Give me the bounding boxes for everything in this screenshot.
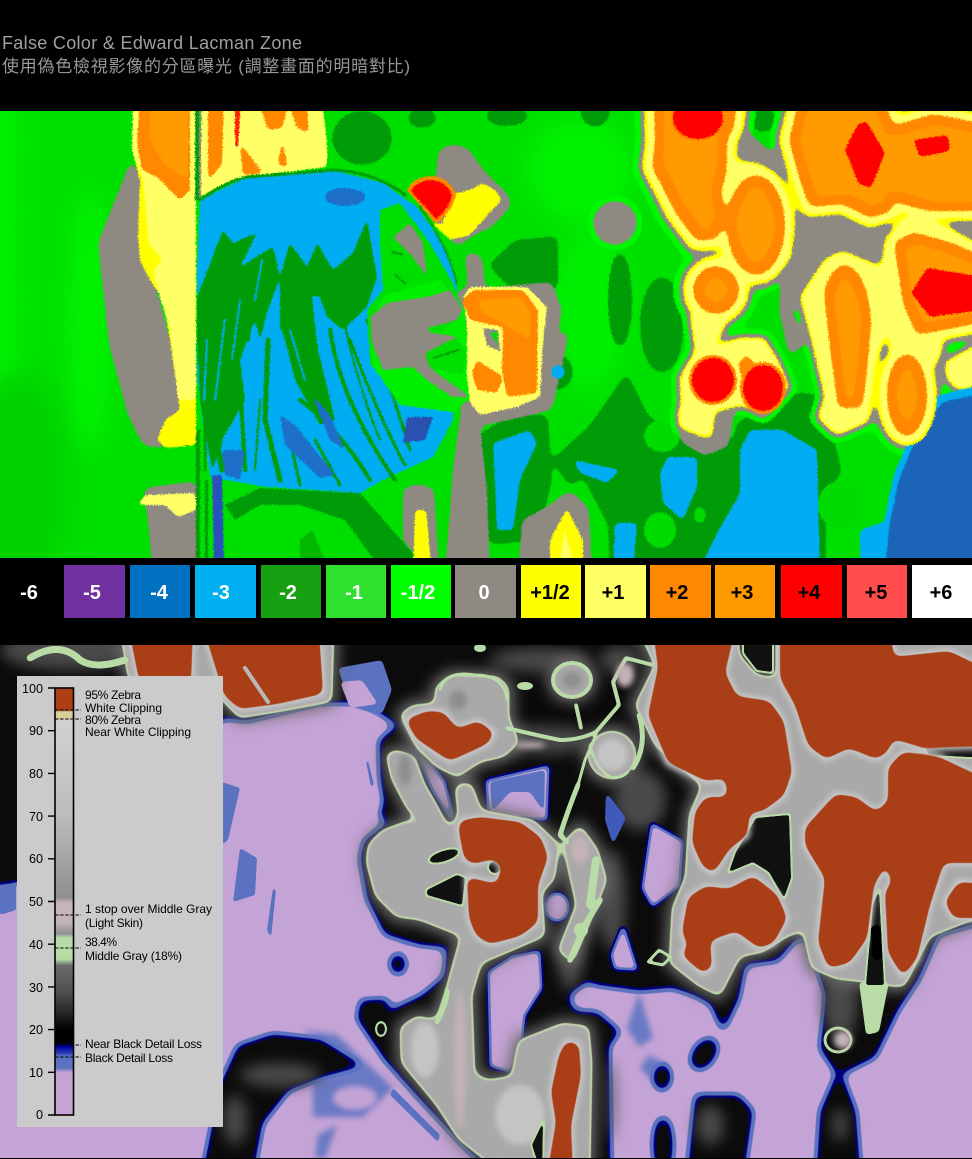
lamp rim <box>407 176 456 224</box>
swatch +4: +4 <box>798 582 821 604</box>
axis ticks <box>48 688 55 1115</box>
shoulder <box>211 474 415 558</box>
swatch -5 <box>64 565 125 618</box>
deep blue corner <box>886 395 972 558</box>
green network <box>30 649 851 1052</box>
dark green zones <box>332 97 842 575</box>
tongue above forehead: blue <box>338 660 392 714</box>
marker labels <box>85 688 212 1065</box>
title line: English: False Color & Edward Lacman Zone <box>2 33 302 53</box>
blue wedge in window <box>490 770 545 812</box>
forehead gray <box>393 223 427 277</box>
hair dark mass <box>197 220 377 470</box>
swatch +1/2: +1/2 <box>530 582 570 604</box>
nose shadow <box>427 320 455 332</box>
lamp orange wedge <box>737 356 756 378</box>
marker labels: (Light Skin) <box>85 916 143 930</box>
right lamp <box>743 365 783 411</box>
swatch +6 <box>912 565 972 618</box>
charcoal patches <box>0 630 858 1145</box>
axis numbers: 100 <box>22 682 43 696</box>
title <box>2 33 410 76</box>
hole purple <box>417 630 972 1070</box>
lip line <box>392 252 458 358</box>
dark zone: blue halo <box>0 630 972 1159</box>
dark islands: black <box>377 632 972 1159</box>
gray mid tones <box>122 630 972 1159</box>
marker labels: 95% Zebra <box>85 688 141 702</box>
blue fades on purple <box>303 992 668 1158</box>
marker labels: Near White Clipping <box>85 725 191 739</box>
green contour <box>122 630 972 1159</box>
swatch +1/2 <box>521 565 581 618</box>
panel: Edward Lacman zone image <box>0 630 972 1159</box>
lips <box>425 337 467 375</box>
bright yellow contour <box>652 100 972 443</box>
light gray lobes <box>411 739 628 1145</box>
deep blue strands <box>222 188 365 480</box>
purple glow in shoulder <box>333 1086 377 1110</box>
right lamp ring <box>740 362 786 414</box>
pink contour <box>122 630 972 1159</box>
orange zone <box>653 100 972 435</box>
blue patches on hair <box>0 760 440 1142</box>
red highlights <box>671 95 972 414</box>
mid gray shading <box>398 672 582 786</box>
shoulder shade <box>300 530 325 560</box>
hair streaks <box>200 170 410 485</box>
axis numbers: 20 <box>29 1023 43 1037</box>
upper lamp core <box>672 111 724 140</box>
blue streak in dark <box>605 792 626 845</box>
title line: Chinese: 使用偽色檢視影像的分區曝光 (調整畫面的明暗對比) <box>2 56 410 76</box>
swatch +2 <box>650 565 711 618</box>
left lamp <box>692 358 734 402</box>
small green blobs <box>474 644 889 1035</box>
exposure scale legend <box>20 565 972 618</box>
swatch -2: -2 <box>279 582 297 604</box>
soft green variations <box>0 100 630 590</box>
face gray area <box>370 290 470 397</box>
upper lamp <box>670 111 726 142</box>
swatch -1/2 <box>391 565 451 618</box>
swatch +3 <box>715 565 775 618</box>
axis numbers: 90 <box>29 724 43 738</box>
marker labels: 80% Zebra <box>85 713 141 727</box>
bright green halos around blobs <box>588 100 972 443</box>
dark zone: black <box>0 630 972 1159</box>
pink-gray highlights <box>454 663 852 1130</box>
swatch +3: +3 <box>731 582 753 604</box>
blue strands over dark hair <box>204 260 305 400</box>
swatch +1 <box>585 565 646 618</box>
orange zebra glow <box>130 630 972 1159</box>
axis numbers: 60 <box>29 852 43 866</box>
axis numbers: 10 <box>29 1066 43 1080</box>
swatch -2 <box>261 565 321 618</box>
vertical door frame <box>195 100 208 570</box>
swatch +5: +5 <box>865 582 887 604</box>
gradient bar <box>55 688 74 1115</box>
swatch +5 <box>847 565 907 618</box>
swatch +4 <box>781 565 842 618</box>
pale yellow zone <box>652 100 972 443</box>
swatch +6: +6 <box>930 582 952 604</box>
swatch 0: 0 <box>478 582 490 604</box>
blue zones <box>493 105 972 575</box>
purple holes: navy rim <box>417 630 972 1070</box>
hole blue rims <box>417 630 972 1070</box>
axis numbers: 0 <box>36 1108 43 1122</box>
red light on hair <box>405 176 502 240</box>
marker labels: White Clipping <box>85 701 162 715</box>
swatch -1 <box>326 565 386 618</box>
axis numbers: 80 <box>29 767 43 781</box>
marker labels: 38.4% <box>85 935 117 949</box>
swatch -3 <box>195 565 256 618</box>
swatch -1: -1 <box>345 582 363 604</box>
marker labels: Middle Gray (18%) <box>85 949 182 963</box>
neck shadow <box>403 417 433 443</box>
panel: false color image <box>0 95 972 590</box>
face shadow <box>372 280 472 412</box>
left wall highlights <box>132 100 327 517</box>
marker labels: Near Black Detail Loss <box>85 1037 202 1051</box>
lit object near nose <box>413 287 583 575</box>
gray zone <box>99 100 972 575</box>
dark zone: navy edge <box>0 630 972 1159</box>
green patches on dark <box>643 420 836 548</box>
axis numbers <box>22 682 43 1122</box>
axis numbers: 70 <box>29 810 43 824</box>
axis numbers: 50 <box>29 895 43 909</box>
swatch -4: -4 <box>150 582 169 604</box>
lamp red <box>411 180 452 219</box>
tongue above forehead: purple <box>340 680 378 708</box>
dark islands: contour <box>377 632 972 1159</box>
swatch -4 <box>130 565 190 618</box>
swatch -6: -6 <box>20 582 38 604</box>
hair edge <box>420 207 457 285</box>
swatch -3: -3 <box>212 582 230 604</box>
swatch +2: +2 <box>666 582 688 604</box>
marker labels: 1 stop over Middle Gray <box>85 902 212 916</box>
swatch -1/2: -1/2 <box>401 582 435 604</box>
shoulder dark band <box>224 487 415 558</box>
dark spot on green block <box>876 930 877 955</box>
marker labels: Black Detail Loss <box>85 1051 173 1065</box>
gray streak in orange block <box>245 668 268 702</box>
lighter orange core <box>662 111 972 420</box>
swatch 0 <box>455 565 516 618</box>
zebra orange shapes <box>130 630 972 1159</box>
axis numbers: 30 <box>29 981 43 995</box>
dashed markers <box>55 710 81 1057</box>
hair <box>197 170 457 493</box>
swatch -5: -5 <box>83 582 101 604</box>
gray glow around mid tones <box>122 630 972 1159</box>
left lamp ring <box>689 355 737 405</box>
face <box>367 203 472 412</box>
panel: luminance scale legend <box>17 676 223 1127</box>
hair strand over forehead <box>444 268 446 272</box>
dark strip <box>212 475 224 565</box>
axis numbers: 40 <box>29 938 43 952</box>
swatch +1: +1 <box>602 582 624 604</box>
